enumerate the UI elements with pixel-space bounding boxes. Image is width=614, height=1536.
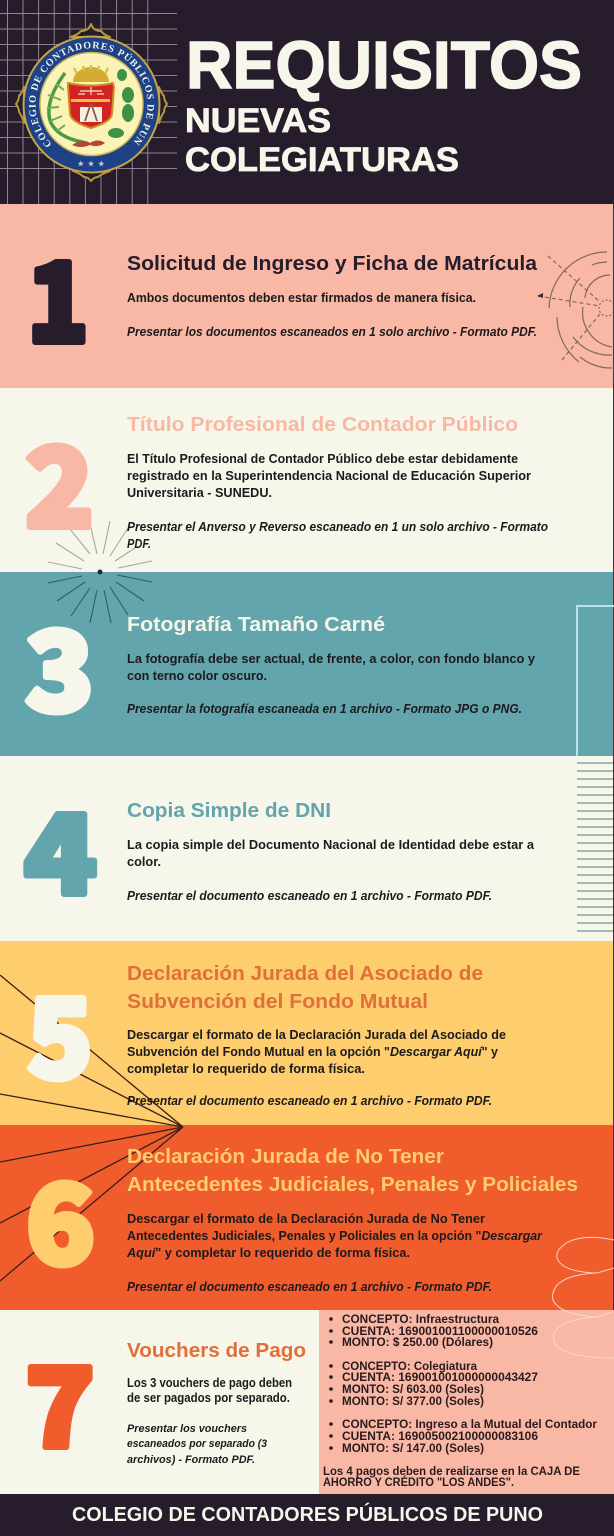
decoration: radiating lines <box>0 975 183 1281</box>
panel: payment details: MONTO: S/ 147.00 (Soles) <box>342 1441 484 1455</box>
number 6: 6 <box>26 1136 95 1296</box>
panel: requirement 2: Universitaria - SUNEDU. <box>127 486 272 500</box>
number 3: 3 <box>25 583 94 743</box>
icon: college seal <box>15 23 168 182</box>
panel: requirement 1 <box>127 253 538 339</box>
panel: payment details: Los 4 pagos deben de realizarse en la CAJA DE <box>323 1464 580 1478</box>
decoration: sunburst <box>48 521 152 623</box>
panel: requirement 6: Antecedentes Judiciales, Penales y Policiales en la opción "Descargar <box>127 1229 543 1243</box>
panel: requirement 5: Subvención del Fondo Mutual <box>127 991 428 1013</box>
panel: requirement 1: Presentar los documentos escaneados en 1 solo archivo - Formato PDF. <box>127 325 537 339</box>
panel: requirement 4: La copia simple del Documento Nacional de Identidad debe estar a <box>127 838 535 852</box>
panel: requirement 7: Presentar los vouchers <box>127 1423 247 1435</box>
panel: requirement 2: registrado en la Superintendencia Nacional de Educación Superior <box>127 469 531 483</box>
panel: payment details: CUENTA: 169001001100000010526 <box>342 1324 538 1338</box>
panel: payment details: MONTO: S/ 377.00 (Soles) <box>342 1394 484 1408</box>
number 4: 4 <box>24 766 97 926</box>
number 2: 2 <box>25 399 94 559</box>
panel: requirement 6: Presentar el documento escaneado en 1 archivo - Formato PDF. <box>127 1280 492 1294</box>
panel: payment details <box>323 1312 597 1489</box>
panel: requirement 5: Declaración Jurada del Asociado de <box>127 963 483 985</box>
panel: requirement 5: completar lo requerido de forma física. <box>127 1062 365 1076</box>
panel: requirement 3: con terno color oscuro. <box>127 669 267 683</box>
panel: requirement 3: La fotografía debe ser actual, de frente, a color, con fondo blanco y <box>127 652 535 666</box>
decoration: looped outlines <box>553 1237 614 1358</box>
panel: requirement 6: Descargar el formato de la Declaración Jurada de No Tener <box>127 1212 485 1226</box>
panel: payment details: CONCEPTO: Ingreso a la Mutual del Contador <box>342 1417 597 1431</box>
footer: COLEGIO DE CONTADORES PÚBLICOS DE PUNO <box>72 1502 543 1526</box>
panel: requirement 7: archivos) - Formato PDF. <box>127 1454 255 1466</box>
panel: requirement 4: Copia Simple de DNI <box>127 800 331 822</box>
panel: requirement 7: de ser pagados por separado. <box>127 1391 290 1405</box>
panel: requirement 4 <box>127 800 535 903</box>
panel: header <box>0 0 614 204</box>
panel: payment details: MONTO: S/ 603.00 (Soles) <box>342 1382 484 1396</box>
panel: payment details: CONCEPTO: Colegiatura <box>342 1359 477 1373</box>
panel: requirement 2 <box>127 414 548 551</box>
title: REQUISITOS <box>186 28 582 103</box>
panel: requirement 2: Presentar el Anverso y Reverso escaneado en 1 un solo archivo - Formato <box>127 520 548 534</box>
panel: requirement 6: Declaración Jurada de No Tener <box>127 1146 444 1168</box>
panel: requirement 3: Presentar la fotografía escaneada en 1 archivo - Formato JPG o PNG. <box>127 702 522 716</box>
panel: payment details: CONCEPTO: Infraestructura <box>342 1312 499 1326</box>
panel: requirement 4: Presentar el documento escaneado en 1 archivo - Formato PDF. <box>127 889 492 903</box>
panel: requirement 3 <box>127 614 535 716</box>
panel: requirement 2: PDF. <box>127 537 151 551</box>
icon: college seal: ★ ★ ★ <box>78 160 105 168</box>
panel: requirement 1: Solicitud de Ingreso y Ficha de Matrícula <box>127 253 538 275</box>
panel: requirement 5: Descargar el formato de la Declaración Jurada del Asociado de <box>127 1028 506 1042</box>
panel: requirement 7 <box>127 1340 306 1466</box>
title: COLEGIATURAS <box>185 141 459 179</box>
decoration: concentric target arcs <box>537 204 614 1310</box>
subtitle: NUEVAS <box>185 102 331 140</box>
number 1: 1 <box>27 214 89 374</box>
footer <box>0 1494 614 1536</box>
panel: requirement 6 <box>126 1146 578 1294</box>
panel: requirement 1: Ambos documentos deben estar firmados de manera física. <box>127 291 476 305</box>
panel: requirement 7: escaneados por separado (3 <box>127 1438 267 1450</box>
panel: requirement 3: Fotografía Tamaño Carné <box>127 614 385 636</box>
panel: payment details: CUENTA: 169001001000000043427 <box>342 1370 538 1384</box>
panel: requirement 2: El Título Profesional de Contador Público debe estar debidamente <box>127 452 518 466</box>
panel: requirement 6: Antecedentes Judiciales, Penales y Policiales <box>127 1174 578 1196</box>
panel: requirement 5: Subvención del Fondo Mutual en la opción "Descargar Aquí" y <box>127 1045 498 1059</box>
panel: requirement 6: Aquí" y completar lo requerido de forma física. <box>126 1246 410 1260</box>
panel: requirement 7: Los 3 vouchers de pago deben <box>127 1376 292 1390</box>
panel: payment details: MONTO: $ 250.00 (Dólares) <box>342 1335 493 1349</box>
decoration: frame and stripes <box>577 606 614 931</box>
panel: requirement 4: color. <box>127 855 161 869</box>
number 5: 5 <box>27 950 93 1110</box>
panel: payment details: AHORRO Y CRÉDITO "LOS ANDES". <box>323 1474 514 1489</box>
panel: payment details: CUENTA: 169005002100000083106 <box>342 1429 538 1443</box>
panel: requirement 7: Vouchers de Pago <box>127 1340 306 1362</box>
title <box>185 28 582 179</box>
panel: requirement 5 <box>127 963 506 1108</box>
number 7: 7 <box>25 1319 95 1479</box>
panel: requirement 5: Presentar el documento escaneado en 1 archivo - Formato PDF. <box>127 1094 492 1108</box>
panel: requirement 2: Título Profesional de Contador Público <box>127 414 518 436</box>
